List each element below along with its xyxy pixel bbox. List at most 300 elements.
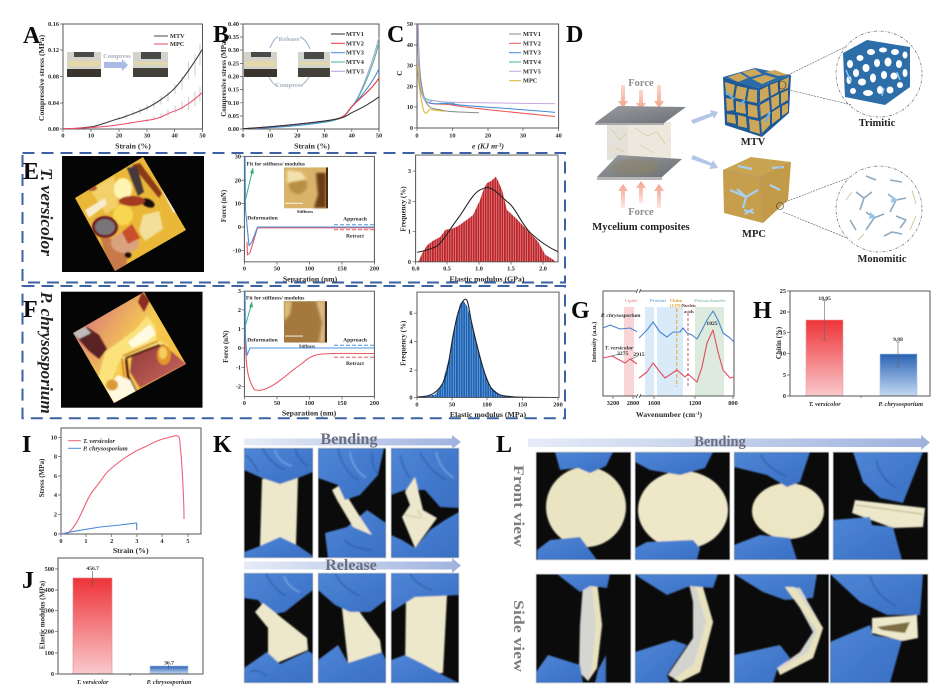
axes A: 20 <box>116 132 122 140</box>
axes J: 500 <box>45 566 54 573</box>
axes C: 20 <box>407 83 413 90</box>
axes B: 0 <box>241 132 245 140</box>
axes histogram F: 150 <box>518 402 527 408</box>
annotations force F: Deformation <box>247 338 279 344</box>
panel J: elastic modulus bar chart <box>22 558 203 686</box>
bar P. chrysosporium <box>150 666 188 674</box>
monomitic label: Monomitic <box>858 254 907 265</box>
axes B: 40 <box>349 132 355 140</box>
axes I: 5 <box>186 538 190 545</box>
bars histogram F <box>417 300 558 398</box>
AFM image E <box>62 156 204 272</box>
curve T. versicolor <box>61 436 184 534</box>
axes histogram F: 2 <box>409 367 412 374</box>
spectrum T. versicolor <box>603 330 734 382</box>
axis label y J: Elastic modulus (MPa) <box>38 580 46 649</box>
axes force E: 100 <box>305 266 314 272</box>
axes force F: 100 <box>305 400 314 407</box>
axes force E: 200 <box>370 266 379 272</box>
axes H: 10 <box>780 351 786 358</box>
band labels: acids <box>684 309 694 314</box>
monomitic zoom circle <box>776 166 922 252</box>
shaded bands <box>624 307 724 396</box>
category labels J <box>77 679 191 686</box>
axes C: 30 <box>407 63 413 70</box>
axes A: 10 <box>88 132 94 140</box>
curve MTV1 <box>418 24 479 113</box>
axes G: 800 <box>728 400 738 407</box>
photo K4 <box>244 573 313 683</box>
front photo 1 <box>536 452 631 560</box>
axes A <box>48 21 206 140</box>
axis label x B: Strain (%) <box>294 142 330 150</box>
peak annotations <box>601 313 718 359</box>
bar T. versicolor <box>73 578 112 674</box>
annotations force E: Fit for stiffness/ modulus <box>246 162 305 168</box>
axes I: 10 <box>51 434 57 441</box>
legend A: MTV <box>170 33 185 40</box>
axes force F: 50 <box>274 400 280 407</box>
axes force E: 0 <box>238 224 241 231</box>
axes H: 25 <box>780 288 786 295</box>
axis label y force F: Force (nN) <box>222 330 230 363</box>
letter E: E <box>23 159 39 185</box>
AFM image F <box>60 285 202 410</box>
composite body <box>607 122 671 160</box>
axes C: 20 <box>485 132 491 140</box>
MPC cube <box>723 157 791 223</box>
species label E: T. versicolor <box>37 168 56 256</box>
axes A: 0.04 <box>48 100 60 107</box>
value labels J: 456.7 <box>86 566 99 572</box>
axes B: 20 <box>294 132 301 140</box>
category labels J: T. versicolor <box>77 679 109 686</box>
axes force E: 30 <box>235 153 241 160</box>
legend C: MTV5 <box>523 68 541 75</box>
peak annotations: P. chrysosporium <box>601 313 641 319</box>
axes force F: 2 <box>238 307 241 314</box>
axes histogram F: 0 <box>415 402 419 408</box>
axes C: 30 <box>520 132 526 140</box>
bar T. versicolor <box>806 320 843 396</box>
legend C: MTV1 <box>523 31 541 38</box>
top plate <box>595 106 686 125</box>
fit curve histogram E <box>417 187 558 252</box>
axes B: 0.20 <box>228 74 239 80</box>
axes histogram F: 100 <box>482 402 492 408</box>
axis label y force E: Force (nN) <box>220 189 228 222</box>
curve MTV4 <box>243 43 379 129</box>
side view label: Side view <box>510 600 526 672</box>
panel D: mycelium composite schematic <box>566 22 922 265</box>
axis label y G: Intensity (a.u.) <box>591 322 598 362</box>
axes histogram F <box>409 292 563 408</box>
axes histogram E: 1 <box>408 229 411 236</box>
axis label y A: Compressive stress (MPa) <box>37 34 46 121</box>
axis label x C: e (KJ m <box>472 142 497 150</box>
legend C <box>509 31 542 85</box>
legend I: T. versicolor <box>83 438 115 445</box>
curve MPC <box>418 65 445 113</box>
axes C: 10 <box>407 104 413 111</box>
inset stiffness map F <box>284 301 327 343</box>
axes C: 0 <box>410 125 413 132</box>
axes I: 0 <box>54 531 57 538</box>
axis label y B: Compressive stress (MPa) <box>220 39 228 117</box>
dashed frame F <box>22 286 565 418</box>
axes force E <box>233 153 379 272</box>
axes C: 10 <box>449 132 456 140</box>
axes histogram E: 0.5 <box>443 266 451 272</box>
axis label y histogram F: Frequency (%) <box>400 320 408 366</box>
front view label: Front view <box>510 465 526 547</box>
panel C: energy curves <box>387 21 562 150</box>
band labels: Nucleic <box>682 303 696 308</box>
peak annotations: 3275 <box>617 351 628 357</box>
axes J: 100 <box>45 650 54 657</box>
arrow to MTV <box>691 110 718 124</box>
curve P. chrysosporium <box>61 523 137 534</box>
photo K3 <box>391 448 459 558</box>
band labels: Polysaccharides <box>694 298 726 303</box>
legend I <box>68 438 128 452</box>
legend B <box>331 31 365 75</box>
axis label x G: ) <box>699 410 702 419</box>
curve MTV5 <box>418 24 555 104</box>
axes C: 40 <box>407 42 413 49</box>
value labels J: 36.7 <box>164 660 174 666</box>
inset photos B <box>244 52 330 77</box>
axes G: 3200 <box>607 400 619 407</box>
letter J: J <box>22 568 34 594</box>
force arrows top <box>618 85 664 110</box>
axis label x histogram F: Elastic modulus (MPa) <box>450 410 527 419</box>
force label top: Force <box>628 78 654 89</box>
legend C: MPC <box>523 78 538 85</box>
compress arrow A <box>103 53 131 71</box>
curve MTV3 <box>243 69 379 129</box>
legend C: MTV3 <box>523 50 541 57</box>
panel L: bending photos of disc <box>496 432 930 683</box>
axes I: 2 <box>110 538 113 545</box>
axes histogram F: 50 <box>449 402 455 408</box>
force plot F <box>222 288 379 418</box>
legend B: MTV5 <box>346 68 364 75</box>
axis label x C: ) <box>500 142 504 150</box>
axes force F: 200 <box>370 400 379 407</box>
force arrows bottom <box>618 181 664 208</box>
axes force E: 10 <box>235 201 241 208</box>
annotations force F: Stiffness <box>299 344 315 348</box>
legend I: P. chrysosporium <box>83 446 128 452</box>
spectrum P. chrysosporium <box>603 311 734 342</box>
axis label x G: -1 <box>695 412 700 417</box>
force label bottom: Force <box>628 207 654 218</box>
release heading K: Release <box>325 557 377 574</box>
axes I: 8 <box>54 454 57 461</box>
value labels H: 9.88 <box>893 337 903 343</box>
letter G: G <box>571 298 590 324</box>
axes B <box>228 21 382 140</box>
axes B: 50 <box>376 132 382 140</box>
band labels: (1376) <box>670 303 683 308</box>
axes histogram E: 1.5 <box>507 266 515 272</box>
axes C: 50 <box>407 21 413 28</box>
letter F: F <box>23 297 38 323</box>
curve MTV <box>63 49 202 129</box>
panel F: P. chrysosporium AFM <box>22 285 565 419</box>
error bars J <box>92 571 168 669</box>
bending arrow L <box>528 435 930 450</box>
inset stiffness map E <box>284 167 328 208</box>
side photo 1 <box>536 574 631 683</box>
legend B: MTV3 <box>346 50 364 57</box>
species label F: P. chrysosporium <box>37 291 56 414</box>
force plot E <box>220 153 379 284</box>
side photo 3 <box>734 574 829 683</box>
value labels H: 18.05 <box>818 296 831 302</box>
axes I: 2 <box>54 512 57 519</box>
trimitic label: Trimitic <box>859 118 896 129</box>
photo K1 <box>244 448 313 558</box>
legend A: MPC <box>170 41 185 48</box>
axes G <box>603 289 738 407</box>
MPC label: MPC <box>742 229 766 240</box>
axes A: 0.08 <box>48 74 59 80</box>
legend B: MTV1 <box>346 31 364 38</box>
axes G: 1600 <box>648 400 660 407</box>
band labels <box>625 298 726 314</box>
approach retract legend F: Retract <box>346 361 364 367</box>
curve MTV5 <box>243 37 379 129</box>
photo K2 <box>318 448 386 558</box>
photo K6 <box>391 573 459 683</box>
axis label y H: Chitin (%) <box>775 326 783 359</box>
axes B: 0.05 <box>228 113 239 120</box>
axis label x C: -3 <box>497 144 502 148</box>
axes force E: 20 <box>235 177 241 184</box>
axes B: 0.10 <box>228 100 239 107</box>
peak annotations: 1025 <box>706 321 718 327</box>
axes H: 20 <box>780 309 786 316</box>
letter B: B <box>213 22 229 48</box>
axes I: 0 <box>59 538 63 545</box>
bending heading L: Bending <box>694 434 747 450</box>
axes A: 0 <box>61 132 65 140</box>
letter A: A <box>23 23 41 49</box>
axes histogram F: 0 <box>409 394 412 402</box>
MTV cube <box>723 68 791 137</box>
axes J: 200 <box>45 629 54 636</box>
MTV label: MTV <box>741 137 766 148</box>
arrow to MPC <box>691 155 718 169</box>
axes C: 0 <box>415 132 419 140</box>
axes C <box>407 21 562 140</box>
letter L: L <box>496 432 512 458</box>
axes B: 0.35 <box>228 34 239 41</box>
annotations force E: Stiffness <box>297 209 313 214</box>
band labels: Proteins <box>650 298 666 303</box>
front photo 3 <box>734 452 829 560</box>
bars histogram E <box>418 177 556 262</box>
axes I: 6 <box>54 473 57 480</box>
category labels H: T. versicolor <box>809 401 841 408</box>
front photo 2 <box>635 452 730 560</box>
release compress cycle: Release <box>279 36 300 43</box>
error bars A <box>119 44 200 122</box>
axes force E: -10 <box>233 247 241 254</box>
panel H: chitin content bar chart <box>753 288 930 408</box>
axes J: 400 <box>45 587 54 594</box>
axes force E: 150 <box>337 266 347 272</box>
axes H: 0 <box>783 393 786 400</box>
axis label y C: C <box>395 70 404 76</box>
curve MTV4 <box>418 34 455 103</box>
photo frames L <box>536 452 928 683</box>
category labels H: P. chrysosporium <box>878 401 923 408</box>
bending heading K: Bending <box>321 431 377 448</box>
letter D: D <box>566 22 583 48</box>
panel E: T. versicolor AFM <box>22 150 565 284</box>
approach retract legend E <box>334 216 374 240</box>
release arrow K <box>244 558 461 573</box>
axis label x A: Strain (%) <box>115 142 151 150</box>
band labels: Chitin <box>670 298 683 303</box>
axes A: 50 <box>199 132 206 140</box>
axes A: 30 <box>144 132 150 140</box>
axes B: 0.25 <box>228 60 239 67</box>
legend B: MTV2 <box>346 40 364 47</box>
dashed frame E <box>22 153 565 282</box>
axes A: 0.12 <box>48 47 59 54</box>
axis label y histogram E: Frequency (%) <box>400 186 408 232</box>
axes H: 15 <box>780 330 786 337</box>
axes J: 0 <box>51 671 54 678</box>
axes J: 300 <box>45 608 54 615</box>
annotations force F: Fit for stiffness/ modulus <box>246 296 304 302</box>
histogram E <box>400 155 558 284</box>
axis label x G: Wavenumber (cm <box>636 410 695 419</box>
axes B: 30 <box>321 132 328 140</box>
fit curve histogram F <box>417 299 558 398</box>
force curves F <box>245 291 374 390</box>
bottom plate <box>597 155 682 180</box>
axis label x force E: Separation (nm) <box>283 274 338 284</box>
approach retract legend E: Approach <box>343 216 368 222</box>
compress arrow A: Compress <box>103 53 131 60</box>
axes B: 0.00 <box>228 126 239 133</box>
side photo 4 <box>830 574 928 683</box>
curve MTV1 <box>243 97 379 129</box>
photo K5 <box>318 573 386 683</box>
approach retract legend F <box>334 338 374 367</box>
curve MTV2 <box>243 78 379 129</box>
letter C: C <box>387 22 404 48</box>
category labels H <box>809 401 923 408</box>
letter I: I <box>22 432 31 458</box>
axes I: 1 <box>84 538 88 545</box>
histogram F <box>400 292 563 419</box>
release compress cycle <box>269 36 310 89</box>
axis label x force F: Separation (nm) <box>282 408 337 418</box>
axes force F <box>236 288 379 407</box>
error bars H <box>822 301 900 367</box>
axes histogram E: 2 <box>408 198 411 205</box>
dashed markers <box>677 308 688 387</box>
panel G: FTIR spectra <box>571 289 738 419</box>
bending arrow K <box>244 435 461 449</box>
axes histogram F: 6 <box>409 310 412 317</box>
composite label: Mycelium composites <box>592 222 690 233</box>
inset photos A <box>67 52 168 77</box>
side photo 2 <box>635 574 730 683</box>
peak annotations: 2915 <box>633 352 645 358</box>
bar P. chrysosporium <box>880 354 917 396</box>
trimitic zoom circle <box>778 31 922 117</box>
axes I <box>51 428 201 545</box>
axes B: 10 <box>267 132 273 140</box>
letter H: H <box>753 298 772 324</box>
axes force F: 1 <box>238 326 241 333</box>
axes force F: 150 <box>337 400 347 407</box>
axes histogram E <box>408 155 558 272</box>
axes force F: -2 <box>236 384 241 390</box>
axes A: 0.16 <box>48 21 59 28</box>
axes G: 2800 <box>627 400 639 407</box>
axes J <box>45 558 203 678</box>
axes C: 40 <box>555 132 562 140</box>
axes histogram E: 0.0 <box>412 266 420 272</box>
axes force F: 0 <box>238 345 241 352</box>
axis label x histogram E: Elastic modulus (GPa) <box>450 274 525 284</box>
axes histogram E: 1.0 <box>475 266 483 272</box>
axes force F: 3 <box>238 288 241 295</box>
axes histogram E: 2.0 <box>539 266 547 272</box>
axes B: 0.15 <box>228 87 239 94</box>
legend C: MTV4 <box>523 59 542 66</box>
axes A: 40 <box>171 132 178 140</box>
panel A: compressive stress of MTV and MPC <box>23 21 206 150</box>
legend A <box>154 33 185 48</box>
axes histogram E: 3 <box>408 168 411 175</box>
axes force E: 50 <box>274 266 280 272</box>
axes H: 5 <box>783 372 786 379</box>
annotations force E <box>246 162 313 222</box>
letter K: K <box>213 432 232 458</box>
axes A: 0.00 <box>48 126 59 133</box>
axes B: 0.30 <box>228 47 239 54</box>
legend C: MTV2 <box>523 40 541 47</box>
axes I: 3 <box>135 538 139 545</box>
band labels: Lipids <box>625 298 637 303</box>
axes force F: -1 <box>236 364 241 371</box>
legend B: MTV4 <box>346 59 365 66</box>
approach retract legend F: Approach <box>343 338 368 344</box>
curve MTV2 <box>418 24 555 116</box>
panel B: compressive stress of MTV1-5 <box>213 21 382 150</box>
annotations force F <box>246 296 315 348</box>
release compress cycle: Compress <box>275 82 303 89</box>
value labels J <box>86 566 174 666</box>
annotations force E: Deformation <box>247 216 279 222</box>
axes G: 1200 <box>689 400 701 407</box>
panel K: bending photos of strip <box>213 431 461 683</box>
curve MTV3 <box>418 24 555 112</box>
value labels H <box>818 296 903 343</box>
axes I: 4 <box>160 538 164 545</box>
approach retract legend E: Retract <box>346 234 364 240</box>
photo frames K <box>244 448 459 683</box>
